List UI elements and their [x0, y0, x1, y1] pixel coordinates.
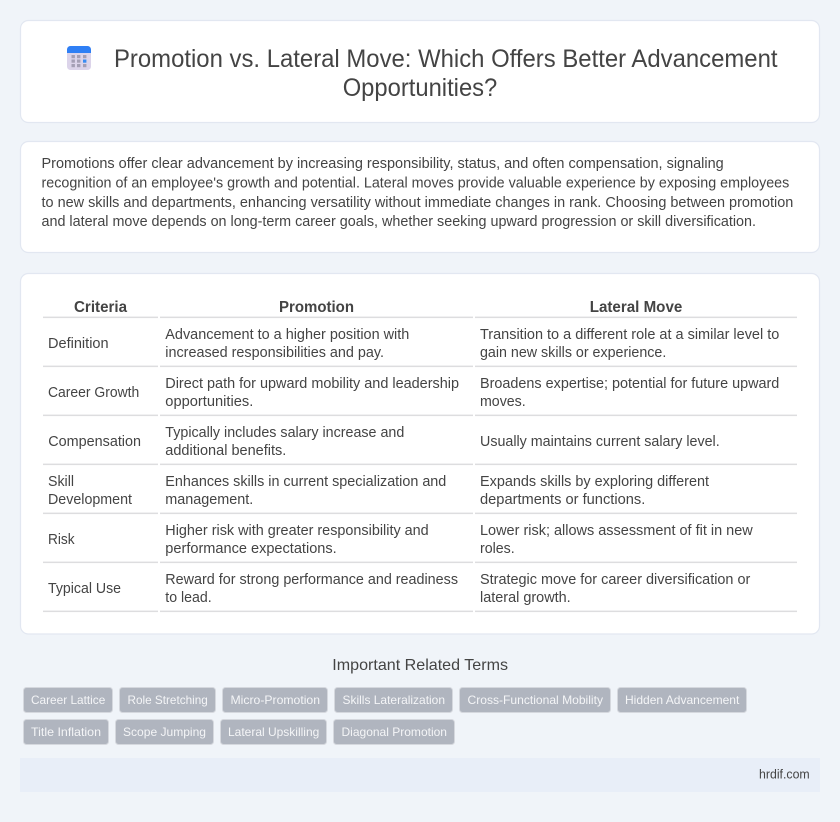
text block: summary: recognition of an employee's growth and potential. Lateral moves provide valuable experience by exposing employees: [42, 175, 789, 191]
table row: risk: Risk: [48, 532, 75, 548]
text block: summary: Promotions offer clear advancement by increasing responsibility, status, and often compensation, signaling: [42, 156, 724, 172]
table row: typical use: Typical Use: [48, 581, 121, 597]
tag list: related terms: Lateral Upskilling: [228, 725, 319, 739]
table row: career growth: Direct path for upward mobility and leadership: [165, 376, 459, 392]
table row: risk: Higher risk with greater responsibility and: [165, 523, 429, 539]
table row: skill development: Expands skills by exploring different: [480, 474, 709, 490]
table row: career growth: Career Growth: [48, 385, 139, 401]
tag list: related terms: Micro-Promotion: [230, 693, 320, 707]
table row: compensation: additional benefits.: [165, 443, 286, 459]
table row: risk: roles.: [480, 541, 515, 557]
table row: compensation: Typically includes salary increase and: [165, 425, 404, 441]
table row: typical use: to lead.: [165, 590, 212, 606]
table row: definition: Transition to a different role at a similar level to: [480, 327, 779, 343]
table row: definition: Advancement to a higher position with: [165, 327, 409, 343]
table row: typical use: lateral growth.: [480, 590, 571, 606]
tag list: related terms: [24, 688, 746, 744]
table header row: [43, 299, 797, 318]
table row: compensation: [43, 425, 797, 465]
table row: definition: [43, 327, 797, 367]
table header row: Promotion: [279, 299, 354, 316]
table row: definition: Definition: [48, 336, 109, 352]
table row: skill development: Skill: [48, 474, 74, 490]
table row: typical use: Strategic move for career diversification or: [480, 572, 751, 588]
tag list: related terms: Skills Lateralization: [342, 693, 445, 707]
table header row: Lateral Move: [590, 299, 682, 316]
panel: title header: [20, 20, 820, 122]
panel: summary paragraph: [20, 142, 820, 252]
table row: typical use: [43, 572, 797, 612]
table header row: Criteria: [74, 299, 127, 316]
text block: summary: and lateral move depends on long-term career goals, whether seeking upward progression or skill diversification.: [42, 214, 756, 230]
table row: skill development: Enhances skills in current specialization and: [165, 474, 446, 490]
table row: career growth: Broadens expertise; potential for future upward: [480, 376, 779, 392]
panel: comparison table: [20, 274, 820, 634]
footer bar: [20, 758, 820, 792]
table row: risk: performance expectations.: [165, 541, 337, 557]
tag list: related terms: Career Lattice: [31, 693, 106, 707]
footer bar: hrdif.com: [759, 767, 810, 782]
icon: calendar: [67, 46, 91, 70]
table row: skill development: Development: [48, 492, 132, 508]
tag list: related terms: Cross-Functional Mobility: [468, 693, 603, 707]
table row: typical use: Reward for strong performance and readiness: [165, 572, 458, 588]
table row: risk: Lower risk; allows assessment of fit in new: [480, 523, 753, 539]
tag list: related terms: Title Inflation: [31, 725, 101, 739]
tag list: related terms: Role Stretching: [128, 693, 208, 707]
table row: career growth: moves.: [480, 394, 526, 410]
tag list: related terms: Scope Jumping: [123, 725, 206, 739]
table row: definition: gain new skills or experience.: [480, 345, 666, 361]
table row: risk: [43, 523, 797, 563]
title: Promotion vs. Lateral Move: Which Offers Better Advancement: [114, 45, 778, 73]
table row: compensation: Compensation: [48, 434, 141, 450]
text block: summary: to new skills and departments, enhancing versatility without immediate changes in rank. Choosing between promotion: [42, 195, 793, 211]
text block: summary: [42, 156, 793, 230]
table row: skill development: management.: [165, 492, 253, 508]
title: [114, 45, 778, 102]
title: Opportunities?: [343, 74, 497, 102]
table row: skill development: departments or functions.: [480, 492, 645, 508]
tag list: related terms: Diagonal Promotion: [342, 725, 447, 739]
table row: compensation: Usually maintains current salary level.: [480, 434, 720, 450]
heading: important related terms: Important Related Terms: [332, 657, 508, 674]
table row: career growth: [43, 376, 797, 416]
table row: definition: increased responsibilities and pay.: [165, 345, 384, 361]
table row: skill development: [43, 474, 797, 514]
tag list: related terms: Hidden Advancement: [625, 693, 740, 707]
table row: career growth: opportunities.: [165, 394, 253, 410]
